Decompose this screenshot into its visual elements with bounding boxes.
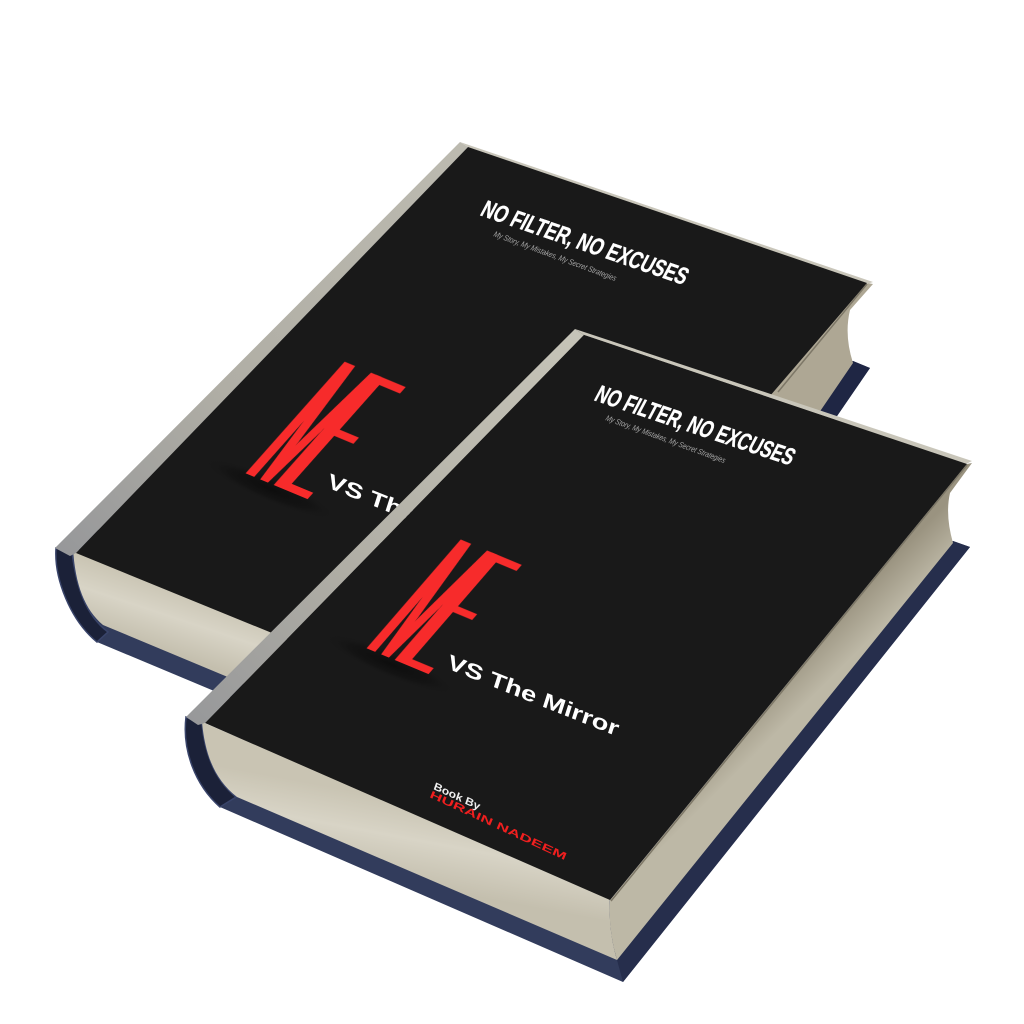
- back book VS The Mirror: VS The Mirror: [324, 470, 502, 560]
- front book Book By: Book By: [432, 781, 482, 813]
- front book bottom page block: [202, 722, 617, 960]
- back book dark spine end: [56, 548, 108, 642]
- back book title: NO FILTER, NO EXCUSES: [476, 196, 694, 290]
- front book subtitle: My Story, My Mistakes, My Secret Strategies: [604, 413, 728, 465]
- front book blue hardcover: [185, 541, 970, 982]
- front book right page block: [610, 463, 972, 960]
- front book: [185, 329, 972, 982]
- front book author: HURAIN NADEEM: [428, 789, 568, 863]
- front book cover: [205, 335, 967, 900]
- back book cover: [76, 147, 867, 722]
- back book right cover shadow line: [778, 284, 867, 392]
- back book ME shadow: [199, 449, 341, 529]
- back book ME wordmark: ME: [208, 321, 442, 540]
- front book title: NO FILTER, NO EXCUSES: [590, 381, 800, 471]
- back book bottom page block: [73, 548, 300, 703]
- back book top edge: [460, 142, 873, 284]
- front book dark spine end: [185, 717, 236, 807]
- front book VS The Mirror: VS The Mirror: [444, 651, 622, 741]
- front book right cover shadow line: [611, 465, 967, 901]
- front book ME wordmark: ME: [330, 500, 556, 714]
- back book right page block: [700, 283, 873, 470]
- front book dark right board: [617, 541, 970, 982]
- back book: [55, 142, 873, 727]
- front book spine band: [186, 329, 584, 725]
- back book blue hardcover: [56, 361, 870, 727]
- front book top edge: [575, 329, 972, 464]
- back book spine band: [55, 142, 468, 556]
- back book subtitle: My Story, My Mistakes, My Secret Strategies: [492, 229, 618, 283]
- front book ME shadow: [319, 624, 461, 704]
- back book dark right board: [780, 361, 870, 470]
